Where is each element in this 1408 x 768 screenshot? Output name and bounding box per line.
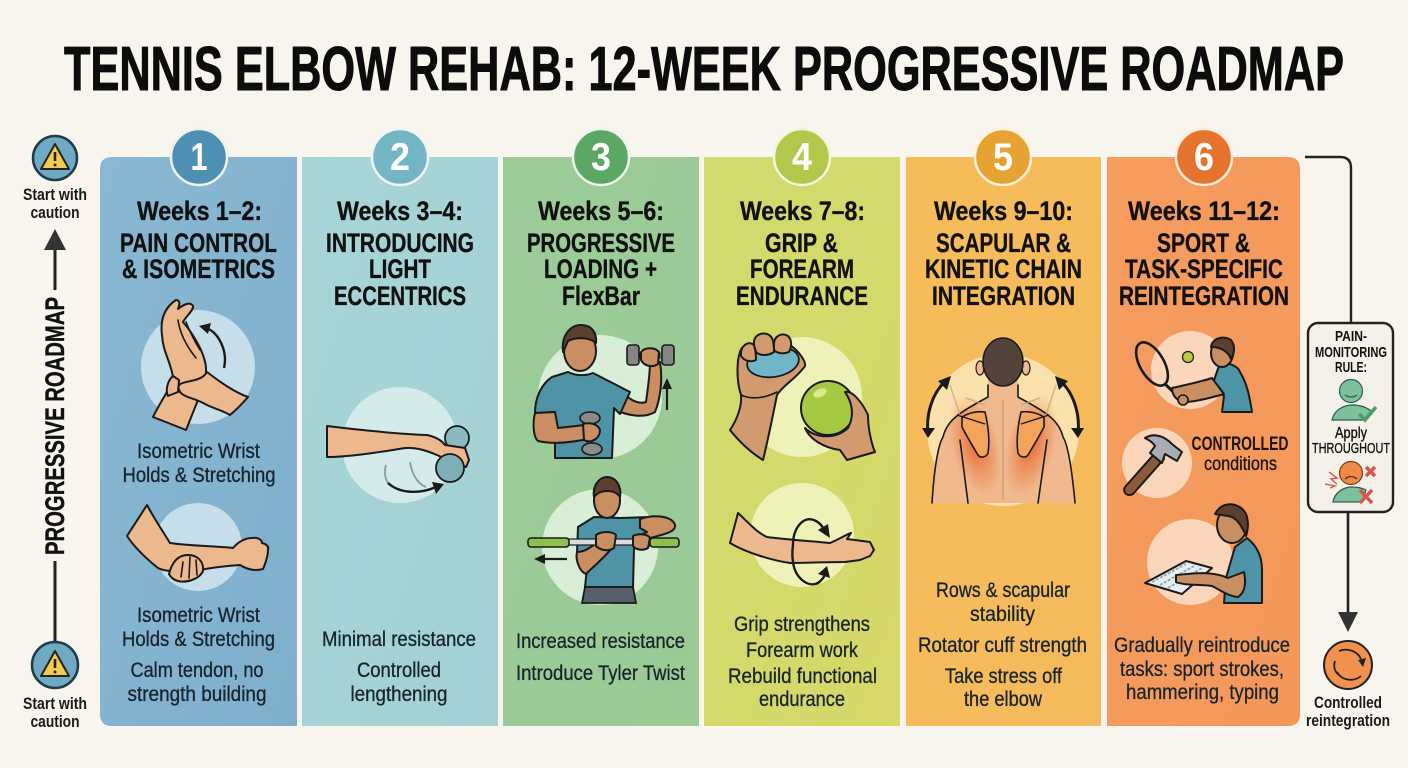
heading: INTRODUCING [326,228,474,258]
label: controlled reintegration: reintegration [1306,712,1390,730]
panel: weeks 5-6 [503,129,699,726]
arrow: down to reintegration [1338,512,1358,632]
heading: PAIN CONTROL [120,228,277,258]
heading: SCAPULAR & [936,228,1071,258]
caption 2: Calm tendon, no [130,659,264,682]
caption: Controlled [357,659,441,682]
heading [736,196,868,311]
heading: Weeks 1–2: [137,196,262,226]
panel background [1107,157,1300,726]
panel: weeks 1-2 [100,129,297,726]
icon: wrist stretch [141,300,255,430]
heading [120,196,277,284]
caption 2: Holds & Stretching [122,628,275,651]
caption: hammering, typing [1126,681,1279,704]
caption: tasks: sport strokes, [1120,658,1284,681]
connector line to lower caution [54,561,56,643]
step badge 6 [1176,129,1232,185]
icon: typing person [1145,504,1262,605]
caption: Grip strengthens [734,613,870,636]
label: controlled reintegration [1306,694,1390,730]
panel background [302,157,498,726]
caption: Increased resistance [516,630,685,653]
step badge 2: 2 [390,136,410,179]
caption: Rows & scapular [936,579,1070,602]
icon: bottom caution [32,642,78,688]
caption [516,630,685,685]
step badge 1: 1 [190,136,208,179]
top caution label: Start with [23,186,87,204]
icon: tennis player [1130,331,1252,412]
heading: TASK-SPECIFIC [1125,254,1283,284]
heading: Weeks 3–4: [337,196,463,226]
step badge 2 [372,129,428,185]
callout note: Apply [1335,425,1367,442]
heading: ECCENTRICS [334,281,466,311]
left progressive roadmap rail [23,136,87,731]
heading: LOADING + [544,254,657,284]
step badge 4 [774,129,830,185]
heading [527,196,675,311]
caption 1: Isometric Wrist [137,440,260,463]
icon: top caution [33,136,77,180]
icon: elbow hold [127,503,268,591]
right rail connector line [1305,157,1351,323]
bottom caution label: caution [30,713,80,731]
step badge 6: 6 [1194,136,1214,179]
caption 1: Holds & Stretching [122,464,276,487]
caption 2: strength building [128,683,266,706]
icon: controlled reintegration [1324,641,1372,689]
caption: the elbow [964,688,1043,711]
heading: KINETIC CHAIN [925,254,1082,284]
heading: GRIP & [765,228,838,258]
caption: endurance [759,688,845,711]
caption: Rotator cuff strength [918,634,1087,657]
callout note [1312,425,1390,457]
label: controlled conditions: conditions [1204,454,1277,475]
caption [918,579,1087,711]
heading: & ISOMETRICS [122,254,275,284]
panel: weeks 3-4 [302,129,498,726]
label: controlled conditions [1192,434,1288,475]
step badge 5: 5 [993,136,1013,179]
caption: Take stress off [945,665,1062,688]
callout heading: RULE: [1335,359,1367,376]
icon: no-pain person with check [1332,380,1376,420]
heading: PROGRESSIVE [527,228,675,258]
heading: SPORT & [1157,228,1250,258]
heading: Weeks 9–10: [934,196,1073,226]
bottom caution label: Start with [23,695,87,713]
caption: Rebuild functional [728,665,877,688]
caption 2 [122,604,275,706]
heading [1119,196,1289,311]
icon: hammer [1122,428,1192,498]
caption [1114,634,1290,704]
icon: upper back and scapulae [922,338,1084,506]
icon: eccentric wrist curl [327,387,469,503]
heading: FOREARM [750,254,854,284]
bottom caution label [23,695,87,731]
heading: INTEGRATION [932,281,1075,311]
heading: ENDURANCE [736,281,868,311]
caption: Minimal resistance [322,628,476,651]
heading: FlexBar [562,281,640,311]
panel: weeks 11-12 [1107,129,1300,726]
top caution label: caution [30,204,80,222]
icon: grip balls [730,333,875,460]
panel: weeks 9-10 [906,129,1101,726]
heading: Weeks 11–12: [1128,196,1280,226]
icon: pain person with cross [1325,462,1375,503]
step badge 4: 4 [792,136,812,179]
caption 2: Isometric Wrist [137,604,260,627]
label: controlled reintegration: Controlled [1314,694,1382,712]
heading [326,196,474,311]
step badge 5 [975,129,1031,185]
callout: pain-monitoring rule [1308,323,1393,512]
icon: man with flexbar [528,477,679,605]
heading: Weeks 7–8: [740,196,865,226]
caption [322,628,476,706]
caption: stability [970,603,1035,626]
step badge 1 [171,129,227,185]
caption: Forearm work [746,639,858,662]
caption [728,613,877,711]
panel background [100,157,297,726]
panel: weeks 7-8 [704,129,900,726]
label: controlled conditions: CONTROLLED [1192,434,1288,455]
step badge 3: 3 [591,136,611,179]
top caution label [23,186,87,222]
icon: man with dumbbells [534,325,674,459]
panel background [503,157,699,726]
rotated label: progressive roadmap: PROGRESSIVE ROADMAP [40,297,70,555]
caption: lengthening [350,683,448,706]
heading [925,196,1082,311]
caption: Gradually reintroduce [1114,634,1290,657]
panel background [906,157,1101,726]
caption: Introduce Tyler Twist [516,662,685,685]
heading: REINTEGRATION [1119,281,1289,311]
heading: LIGHT [369,254,431,284]
heading: Weeks 5–6: [538,196,664,226]
callout heading: PAIN- [1335,328,1367,345]
callout heading [1315,328,1387,376]
arrow: up [44,229,66,290]
panel background [704,157,900,726]
step badge 3 [573,129,629,185]
caption 1 [122,440,276,487]
icon: forearm rotation [730,483,874,587]
